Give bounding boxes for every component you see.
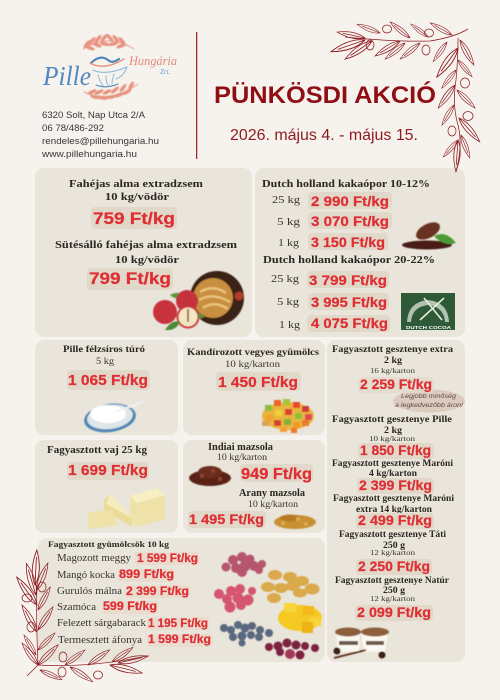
image: raspberries <box>214 584 256 612</box>
row: Felezett sárgabarack <box>57 617 209 630</box>
row: 1 kg: 1 kg <box>279 320 301 331</box>
product: gesztenye extra <box>332 344 453 393</box>
contact details <box>41 110 159 160</box>
product: gesztenye Maróni: Fagyasztott gesztenye Maróni <box>332 458 454 468</box>
row: 25 kg: 25 kg <box>272 195 301 206</box>
row: Szamóca <box>57 601 158 614</box>
decoration: bottom-left olive branch <box>14 550 149 684</box>
row: 1 kg: 3 150 Ft/kg <box>311 234 385 250</box>
image: butter blocks <box>88 488 165 529</box>
row: Gurulós málna <box>57 585 190 598</box>
icon: bottom wheat <box>84 81 138 100</box>
row: 1 kg: 4 075 Ft/kg <box>311 315 388 331</box>
panel: frozen fruits <box>38 538 325 662</box>
panel: apple extract <box>35 168 252 337</box>
product: gesztenye Maróni: 4 kg/karton <box>369 468 417 478</box>
panel: túró <box>35 340 178 435</box>
panel: candied fruit: 1 450 Ft/kg <box>218 374 298 391</box>
title: PÜNKÖSDI AKCIÓ <box>214 81 436 109</box>
product: gesztenye Natúr <box>335 575 449 621</box>
image: mango cubes <box>278 603 322 633</box>
row: Magozott meggy <box>57 552 199 565</box>
panel: candied fruit: 10 kg/karton <box>225 360 280 370</box>
row: Mangó kocka: Mangó kocka <box>57 570 116 581</box>
row: Felezett sárgabarack: Felezett sárgabarack <box>57 618 146 629</box>
product: Fahéjas alma extradzsem: 759 Ft/kg <box>93 209 175 228</box>
row: Termesztett áfonya: 1 599 Ft/kg <box>148 634 211 646</box>
image: frozen sour cherries <box>222 552 266 577</box>
panel: túró: 5 kg <box>96 357 114 367</box>
image: blueberries <box>220 621 273 646</box>
product: Fahéjas alma extradzsem: Fahéjas alma extradzsem <box>69 179 203 190</box>
product: gesztenye extra: 16 kg/karton <box>370 366 415 375</box>
product: Fahéjas alma extradzsem: 10 kg/vödör <box>105 192 169 203</box>
row: 25 kg: 25 kg <box>271 274 300 285</box>
product: Sütésálló fahéjas alma extradzsem <box>55 240 237 290</box>
panel: butter: 1 699 Ft/kg <box>68 462 148 479</box>
panel: raisins: Arany mazsola <box>239 488 305 499</box>
decoration: top-right olive branch <box>330 20 482 172</box>
row: 5 kg: 5 kg <box>277 297 300 308</box>
row: 1 kg: 1 kg <box>278 238 300 249</box>
panel: túró: 1 065 Ft/kg <box>68 372 148 389</box>
product: gesztenye Maróni extra: 2 499 Ft/kg <box>358 512 432 528</box>
row: 25 kg: 2 990 Ft/kg <box>311 193 389 209</box>
icon: chef hat <box>90 58 127 87</box>
contact details: www.pillehungaria.hu <box>41 149 137 160</box>
contact details: 6320 Solt, Nap Utca 2/A <box>42 110 146 121</box>
image: cocoa pod and powder <box>402 219 456 250</box>
image: apricot halves <box>261 570 320 603</box>
product: Sütésálló fahéjas alma extradzsem: 799 Ft/kg <box>89 269 171 288</box>
row: Gurulós málna: 2 399 Ft/kg <box>126 586 189 598</box>
row: Termesztett áfonya <box>58 634 212 647</box>
logo wordmark: Pille <box>42 61 91 91</box>
image: apple pie and apples <box>153 271 244 330</box>
image: túró on plate <box>82 401 143 435</box>
row: 5 kg: 3 070 Ft/kg <box>311 213 389 229</box>
logo: Dutch Cocoa: DUTCH COCOA <box>406 325 452 331</box>
image: chestnut desserts <box>334 628 389 658</box>
product: gesztenye Táti: 12 kg/karton <box>370 548 415 557</box>
panel: raisins: 949 Ft/kg <box>241 466 312 483</box>
panel: raisins <box>183 440 325 533</box>
date range: 2026. május 4. - május 15. <box>230 127 418 144</box>
product: gesztenye Natúr: 250 g <box>383 585 406 595</box>
image: golden raisins <box>274 514 316 529</box>
panel: túró: Pille félzsíros túró <box>63 345 145 355</box>
product: gesztenye Táti: 250 g <box>383 540 406 550</box>
heading: cocoa 20-22%: Dutch holland kakaópor 20-22% <box>263 255 435 266</box>
product: gesztenye Pille: Fagyasztott gesztenye Pille <box>332 414 453 425</box>
product: gesztenye extra: Fagyasztott gesztenye extra <box>332 344 453 355</box>
product: gesztenye Pille: 1 850 Ft/kg <box>360 442 431 458</box>
product: gesztenye Natúr: Fagyasztott gesztenye Natúr <box>335 575 449 585</box>
row: 5 kg <box>277 212 392 229</box>
row: Magozott meggy: Magozott meggy <box>57 553 131 564</box>
row: Mangó kocka <box>57 569 175 582</box>
logo wordmark: Zrt.: Zrt. <box>160 68 171 76</box>
callout: best quality: Legjobb minőség <box>401 394 457 400</box>
product: gesztenye Natúr: 2 099 Ft/kg <box>357 604 431 620</box>
panel: candied fruit: Kandírozott vegyes gyümölcs <box>187 347 319 358</box>
product: gesztenye Pille: 2 kg <box>384 425 402 436</box>
row: 5 kg: 5 kg <box>277 217 301 228</box>
contact details: rendeles@pillehungaria.hu <box>42 136 159 147</box>
product: gesztenye Maróni extra: extra 14 kg/karton <box>356 504 432 514</box>
callout: best quality <box>393 390 465 412</box>
product: gesztenye Maróni extra: Fagyasztott gesztenye Maróni <box>333 493 455 503</box>
heading: cocoa 10-12%: Dutch holland kakaópor 10-12% <box>262 179 430 190</box>
product: gesztenye Táti <box>339 529 447 575</box>
logo wordmark: Hungária: Hungária <box>128 53 177 68</box>
panel: frozen fruits: Fagyasztott gyümölcsök 10 kg <box>48 539 170 549</box>
image: dark cherries <box>265 638 319 660</box>
panel: butter <box>35 440 178 533</box>
product: gesztenye Natúr: 12 kg/karton <box>370 594 415 603</box>
image: candied fruit pile <box>262 399 314 433</box>
panel: raisins: 1 495 Ft/kg <box>189 511 264 527</box>
panel: chestnut <box>327 340 465 662</box>
row: Magozott meggy: 1 599 Ft/kg <box>137 553 198 565</box>
product: gesztenye Pille: 10 kg/karton <box>369 434 415 443</box>
row: Felezett sárgabarack: 1 195 Ft/kg <box>148 618 208 630</box>
product: Sütésálló fahéjas alma extradzsem: 10 kg/vödör <box>115 255 179 266</box>
product: gesztenye Maróni: 2 399 Ft/kg <box>359 477 432 493</box>
row: 5 kg <box>277 293 389 310</box>
row: 1 kg <box>279 315 390 332</box>
product: gesztenye Táti: 2 250 Ft/kg <box>358 558 430 574</box>
image: dark raisins <box>189 466 231 486</box>
row: 25 kg: 3 799 Ft/kg <box>309 272 387 288</box>
row: Gurulós málna: Gurulós málna <box>57 586 123 597</box>
row: Szamóca: Szamóca <box>57 602 97 613</box>
panel: raisins: 10 kg/karton <box>217 452 268 462</box>
product: gesztenye extra: 2 kg <box>384 355 402 366</box>
row: 25 kg <box>272 192 392 209</box>
row: Mangó kocka: 899 Ft/kg <box>119 569 174 581</box>
panel: cocoa powder <box>255 168 465 337</box>
row: Termesztett áfonya: Termesztett áfonya <box>58 635 143 646</box>
panel: butter: Fagyasztott vaj 25 kg <box>47 445 147 456</box>
panel: raisins: Indiai mazsola <box>208 442 273 453</box>
row: 5 kg: 3 995 Ft/kg <box>311 294 387 310</box>
row: 25 kg <box>271 271 389 288</box>
product: Fahéjas alma extradzsem <box>69 179 203 229</box>
row: 1 kg <box>278 233 388 250</box>
product: gesztenye Pille <box>332 414 453 459</box>
logo: Dutch Cocoa <box>401 293 455 331</box>
callout: best quality: a legkedvezőbb áron! <box>395 403 463 409</box>
panel: candied fruit <box>183 340 325 435</box>
product: gesztenye Maróni <box>332 458 454 494</box>
panel: raisins: 10 kg/karton <box>248 499 299 509</box>
row: Szamóca: 599 Ft/kg <box>103 601 157 613</box>
product: gesztenye Táti: Fagyasztott gesztenye Táti <box>339 529 447 539</box>
product: gesztenye Maróni extra <box>333 493 455 529</box>
contact details: 06 78/486-292 <box>42 123 104 134</box>
product: gesztenye extra: 2 259 Ft/kg <box>360 376 432 392</box>
icon: top wheat <box>82 33 134 51</box>
product: Sütésálló fahéjas alma extradzsem: Sütésálló fahéjas alma extradzsem <box>55 240 237 251</box>
logo: Pille Hungária <box>42 33 177 100</box>
